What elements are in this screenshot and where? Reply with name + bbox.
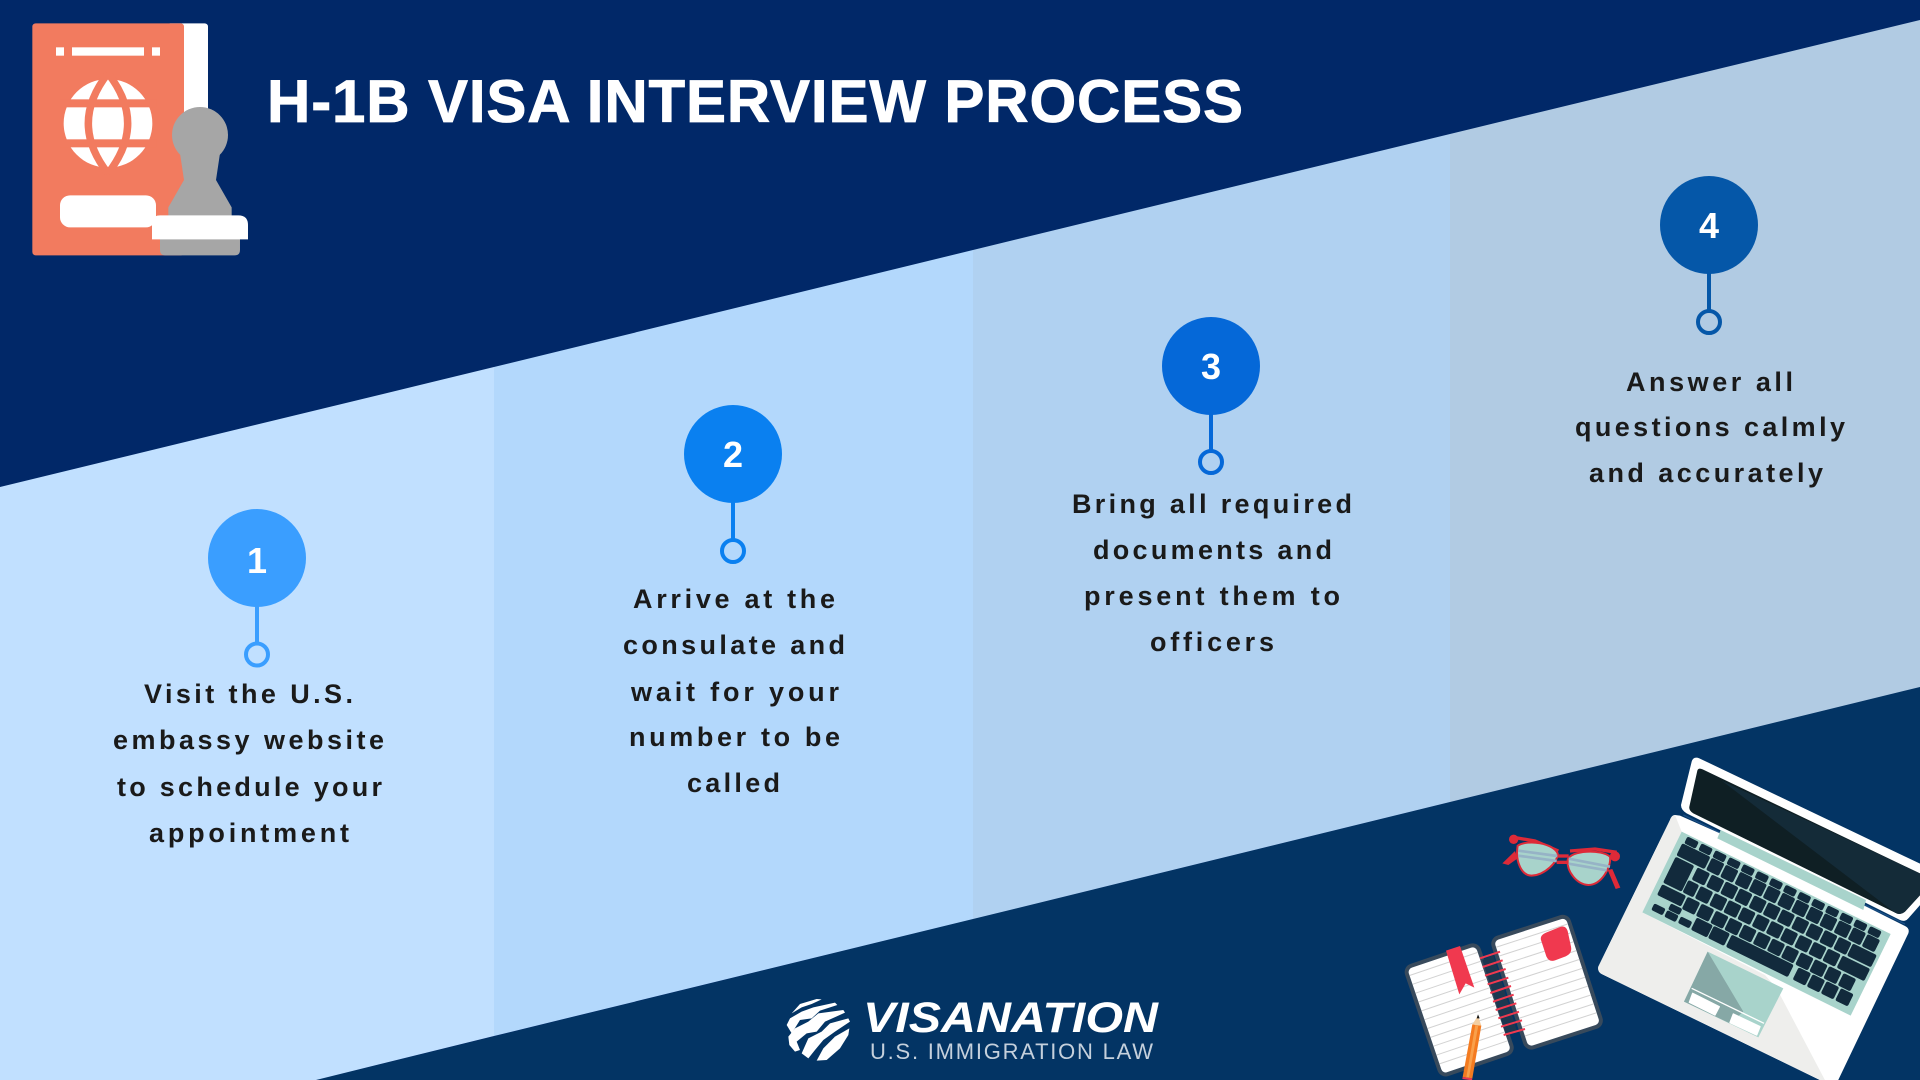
step 1 text: to schedule your <box>117 772 382 802</box>
step 1 text: embassy website <box>113 725 384 755</box>
title: H-1B VISA INTERVIEW PROCESS <box>267 68 1243 135</box>
icon: notebook and pencil <box>1405 915 1603 1080</box>
step 3 text: Bring all required <box>1072 489 1352 519</box>
laptop touchpad <box>1684 952 1783 1037</box>
step 1 text: appointment <box>149 818 349 848</box>
step 3 text: documents and <box>1093 535 1332 565</box>
icon: glasses <box>1502 835 1620 889</box>
logo globe <box>787 999 850 1061</box>
laptop base <box>1598 815 1909 1080</box>
step 3 marker <box>1162 317 1260 473</box>
logo tagline: U.S. IMMIGRATION LAW <box>870 1039 1153 1064</box>
step 1 marker <box>208 509 306 666</box>
logo: VisaNation <box>787 994 1159 1064</box>
icon: laptop <box>1598 758 1920 1080</box>
step 2 marker: 2 <box>723 434 743 475</box>
step 4 marker: 4 <box>1699 205 1719 246</box>
step 3 text: officers <box>1150 627 1274 657</box>
step 4 marker <box>1660 176 1758 333</box>
step 4 text: Answer all <box>1626 367 1793 397</box>
panel: step 3 <box>973 134 1450 919</box>
step 4 text: and accurately <box>1589 458 1823 488</box>
panel: step 4 <box>1450 20 1920 802</box>
laptop lid <box>1681 758 1920 921</box>
step 1 marker: 1 <box>247 540 267 581</box>
step 3 marker: 3 <box>1201 346 1221 387</box>
step 1 text <box>113 679 384 848</box>
step 2 text: called <box>687 768 780 798</box>
laptop keys <box>1650 836 1887 1008</box>
step 4 text <box>1575 367 1845 488</box>
panel: step 2 <box>494 250 973 1036</box>
step 3 text: present them to <box>1084 581 1340 611</box>
step 2 text: wait for your <box>630 677 839 707</box>
step 2 text: number to be <box>629 722 840 752</box>
step 2 text: consulate and <box>623 630 845 660</box>
panel: step 1 <box>0 367 494 1080</box>
step 2 marker <box>684 405 782 562</box>
step 3 text <box>1072 489 1352 657</box>
step 1 text: Visit the U.S. <box>144 679 353 709</box>
icon: passport and stamp <box>32 23 248 255</box>
step 2 text: Arrive at the <box>633 584 835 614</box>
step 2 text <box>623 584 845 798</box>
step 4 text: questions calmly <box>1575 412 1845 442</box>
logo wordmark: VISANATION <box>863 994 1159 1042</box>
